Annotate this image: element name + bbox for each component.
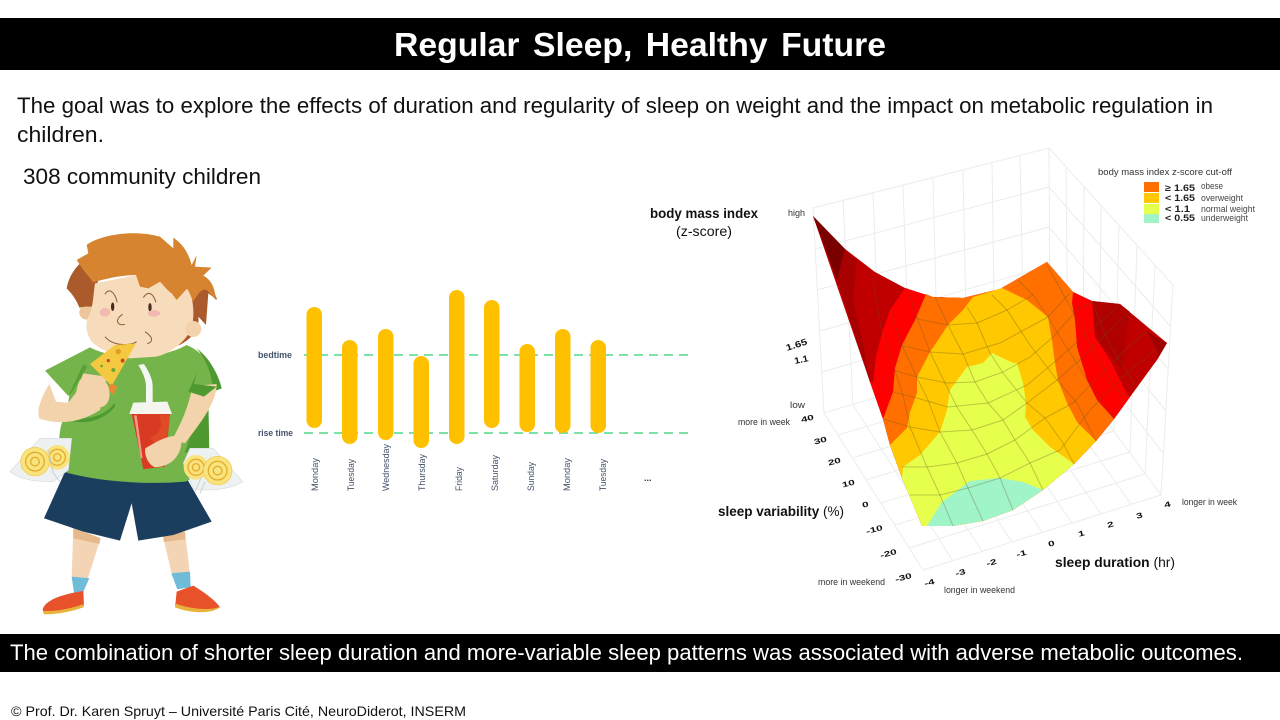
- row labels: [258, 350, 293, 438]
- sleep duration axis ticks: 2: [1106, 520, 1115, 530]
- sleep duration axis ticks: -3: [954, 568, 967, 579]
- sleep duration axis ticks: 0: [1047, 539, 1056, 549]
- y axis labels: low: [790, 400, 806, 410]
- day labels: Friday: [454, 467, 464, 491]
- title banner: Regular Sleep, Healthy Future: [394, 26, 886, 63]
- sleep timing chart: [258, 290, 688, 491]
- y axis title: body mass index: [650, 205, 758, 221]
- day labels: Thursday: [417, 454, 427, 491]
- sleep variability axis ticks: [800, 413, 913, 584]
- shorts: [44, 472, 212, 541]
- legend: normal weight: [1201, 204, 1255, 214]
- surface: mid shade right: [1092, 301, 1130, 370]
- sleep variability axis ticks: 10: [841, 478, 856, 490]
- day labels: Monday: [562, 457, 572, 491]
- goal text: The goal was to explore the effects of duration and regularity of sleep on weight and the impact on metabolic regulation in: [17, 93, 1213, 118]
- legend: obese: [1201, 181, 1223, 191]
- day labels: Tuesday: [598, 459, 608, 491]
- surface mesh: [873, 265, 1157, 526]
- legend: ≥ 1.65: [1165, 183, 1195, 193]
- reference lines: [304, 355, 688, 433]
- day labels: Wednesday: [381, 444, 391, 491]
- conclusion banner: [0, 634, 1280, 672]
- y axis labels: longer in weekend: [944, 585, 1015, 595]
- legend: underweight: [1201, 213, 1248, 223]
- drink cup: [129, 364, 182, 469]
- y axis labels: high: [788, 208, 805, 218]
- left arm: [38, 373, 107, 422]
- y axis labels: more in weekend: [818, 577, 885, 587]
- left sleeve: [45, 347, 90, 396]
- sleep variability axis title: sleep variability (%): [718, 503, 844, 519]
- legend: < 0.55: [1165, 213, 1195, 223]
- sleep duration axis ticks: 4: [1163, 500, 1172, 510]
- sleep variability axis ticks: 30: [813, 435, 828, 447]
- y axis labels: [738, 208, 1237, 595]
- shirt body: [59, 345, 222, 483]
- sleep variability axis ticks: -10: [865, 524, 884, 536]
- day labels: Saturday: [490, 455, 500, 491]
- surface: red band: [870, 262, 1130, 526]
- y axis labels: longer in week: [1182, 497, 1237, 507]
- sleep variability axis ticks: 40: [800, 413, 815, 425]
- sleep variability axis ticks: 20: [827, 456, 842, 468]
- legend: < 1.1: [1165, 204, 1190, 214]
- sleep duration axis ticks: -1: [1015, 549, 1028, 560]
- surface: orange band: [883, 262, 1114, 526]
- sleep bars: [306, 290, 606, 448]
- sleep variability axis ticks: -20: [879, 548, 898, 560]
- illustration: boy eating pizza: [10, 233, 243, 614]
- row labels: rise time: [258, 428, 293, 438]
- surface: underweight zone: [927, 478, 1043, 526]
- y axis title: [650, 205, 758, 239]
- day labels: Tuesday: [346, 459, 356, 491]
- sleep duration axis ticks: -4: [923, 578, 936, 589]
- surface: dark shade right: [1147, 332, 1167, 360]
- sleep duration axis ticks: 1: [1077, 529, 1086, 539]
- legend: < 1.65: [1165, 193, 1195, 203]
- y axis labels: 1.1: [793, 353, 809, 366]
- surface: normal weight zone: [902, 353, 1074, 526]
- left snack rolls: [10, 438, 72, 482]
- shoes: [43, 586, 220, 614]
- sleep variability axis ticks: 0: [861, 500, 870, 510]
- row labels: bedtime: [258, 350, 292, 360]
- head and hair, drawn in a head-local frame: [67, 233, 217, 358]
- legs: [72, 527, 190, 580]
- goal text: [17, 93, 1213, 147]
- legend: body mass index z-score cut-off: [1098, 167, 1233, 177]
- y axis labels: more in week: [738, 417, 790, 427]
- right arm: [172, 384, 217, 443]
- surface: darkest peak: [813, 216, 845, 280]
- legend: overweight: [1201, 193, 1243, 203]
- day labels: Monday: [310, 457, 320, 491]
- surface: dark shade left: [837, 249, 870, 382]
- title banner: [0, 18, 1280, 70]
- conclusion banner: The combination of shorter sleep duration and more-variable sleep patterns was associated with adverse metabolic outcomes.: [10, 640, 1243, 665]
- pizza hand: [76, 376, 110, 417]
- pizza slice: [90, 343, 136, 395]
- right snack rolls: [183, 448, 243, 493]
- legend: [1098, 167, 1255, 223]
- copyright footer: © Prof. Dr. Karen Spruyt – Université Paris Cité, NeuroDiderot, INSERM: [11, 703, 466, 719]
- surface: high zone: [813, 216, 1167, 526]
- 3D surface chart: [650, 148, 1255, 595]
- chart walls and floor grid: [813, 148, 1173, 570]
- sleep duration axis ticks: 3: [1135, 511, 1144, 521]
- sleep duration axis ticks: -2: [985, 558, 998, 569]
- socks: [72, 572, 191, 593]
- sample size text: 308 community children: [23, 164, 261, 189]
- day labels: [310, 444, 652, 491]
- day labels: Sunday: [526, 462, 536, 491]
- right sleeve fold: [188, 373, 217, 397]
- day labels: ...: [644, 473, 652, 483]
- y axis title: (z-score): [676, 223, 732, 239]
- y axis labels: 1.65: [785, 337, 809, 353]
- goal text: children.: [17, 122, 104, 147]
- sleep duration axis title: sleep duration (hr): [1055, 554, 1175, 570]
- sleep variability axis ticks: -30: [894, 572, 913, 584]
- sleep duration axis ticks: [923, 500, 1172, 589]
- surface: yellow band: [890, 288, 1096, 526]
